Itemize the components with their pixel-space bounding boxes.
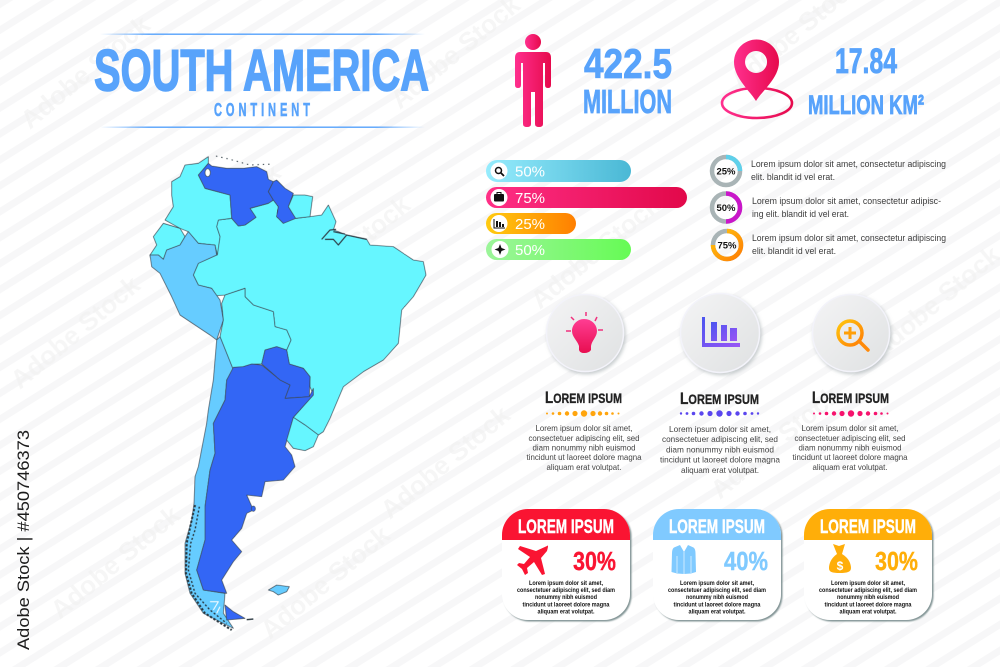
map: Venezuela [198,163,273,226]
map: Chilean fjords coast [186,505,232,630]
body text [668,580,766,616]
icon: person [515,34,551,127]
map: Amazon delta [322,229,367,245]
description: Lorem ipsum dolor sit amet, [669,424,771,434]
body text: nonummy nibh euismod [686,594,748,601]
text: Adobe Stock [5,269,146,395]
dots [813,410,888,417]
map: Argentina [197,364,313,593]
map: Suriname [288,195,313,218]
text: item 3: Lorem ipsum dolor sit amet, consectetur adipiscing [752,233,946,243]
map: Chile [185,337,233,628]
donut: 25%: 25% [716,166,736,178]
body text: nonummy nibh euismod [837,594,899,601]
unit: MILLION KM² [808,90,924,120]
map: Ecuador [150,223,185,259]
description: tincidunt ut laoreet dolore magna [526,452,642,462]
bar: 75% briefcase [486,187,687,208]
description: aliquam erat volutpat. [546,462,622,472]
icon: location pin [722,40,792,118]
text: item 1 [751,159,946,182]
panel: card blue: LOREM IPSUM [669,516,765,538]
map: South America [150,156,426,630]
description: aliquam erat volutpat. [681,465,759,475]
description: diam nonummy nibh euismod [666,444,774,454]
title block [94,34,429,128]
heading: LOREM IPSUM [545,388,622,407]
body text [819,580,917,616]
icon: money bag: $ [837,559,844,573]
body text: consectetuer adipiscing elit, sed diam [668,587,766,594]
donut: 75% [713,231,741,259]
text: item 3 [752,233,946,256]
description: consectetuer adipiscing elit, sed [794,433,906,443]
body text: tincidunt ut laoreet dolore magna [522,602,610,608]
body text: Lorem ipsum dolor sit amet, [680,580,754,587]
text: item 2 [752,196,941,219]
text: Adobe Stock [705,379,846,505]
bar: 50% star [486,239,631,260]
map: Caribbean islands [216,156,273,165]
panel: card amber: LOREM IPSUM [820,516,916,538]
number: 422.5 [584,40,672,87]
number: 17.84 [835,42,897,81]
map: Tierra del Fuego [225,605,245,620]
body text: consectetuer adipiscing elit, sed diam [819,587,917,594]
bar: 50% search: 50% [515,164,545,180]
bar: 50% search [486,160,631,182]
unit: MILLION [583,83,672,120]
text: Adobe Stock [195,399,336,525]
description: tincidunt ut laoreet dolore magna [660,454,780,464]
description [660,424,780,475]
map: Uruguay [287,417,318,451]
map: Guyana [268,180,296,223]
text: Adobe Stock [157,159,287,275]
description: Lorem ipsum dolor sit amet, [536,423,632,433]
text: item 2: ing elit. blandit id vel erat. [752,209,849,219]
donut: 50% [712,194,740,222]
stock credit: Adobe Stock | #450746373 [15,430,33,650]
icon: suit jacket [672,545,696,574]
description [792,423,908,472]
percent: 40% [724,546,768,576]
description: aliquam erat volutpat. [812,462,888,472]
map: Bolivia [220,288,291,370]
dots [546,410,620,417]
card header [804,509,932,540]
body text: tincidunt ut laoreet dolore magna [674,602,761,608]
panel: card blue [653,509,781,620]
title: SOUTH AMERICA [94,38,429,104]
text: Adobe Stock [45,499,186,625]
map: Brazil [193,200,426,435]
text: Adobe Stock [525,189,666,315]
body text: nonummy nibh euismod [535,594,597,601]
donut list [712,157,946,259]
heading: LOREM IPSUM [680,389,759,408]
body text: consectetuer adipiscing elit, sed diam [517,587,615,594]
stat: population [515,34,672,127]
bar chart [486,160,687,260]
body text: Lorem ipsum dolor sit amet, [529,580,603,587]
donut: 50%: 50% [716,203,736,214]
description: diam nonummy nibh euismod [798,442,902,452]
description [526,423,642,472]
body text [517,580,615,616]
percent: 30% [573,546,616,576]
stat: area [722,40,924,120]
feature: search [792,294,908,472]
description: tincidunt ut laoreet dolore magna [792,452,908,462]
map: Falkland Islands [268,585,289,595]
description: diam nonummy nibh euismod [532,442,636,452]
card header [502,509,630,540]
dots [680,410,759,417]
panel: card amber [804,509,932,620]
icon: bar chart [680,294,760,372]
panel: card red [502,509,630,620]
map: Paraguay [262,347,310,398]
body text: aliquam erat volutpat. [688,608,746,616]
text: item 3: elit. blandit id vel erat. [752,246,836,256]
donut: 75%: 75% [717,240,737,252]
body text: aliquam erat volutpat. [840,608,897,616]
text: Adobe Stock [255,519,396,645]
bar: 75% briefcase: 75% [515,190,545,207]
feature: idea [526,294,642,472]
text: item 2: Lorem ipsum dolor sit amet, consectetur adipisc- [752,196,941,206]
panel: card red: LOREM IPSUM [518,516,614,538]
text: Adobe Stock [15,9,156,135]
text: Adobe Stock [375,399,516,525]
text: item 1: Lorem ipsum dolor sit amet, consectetur adipiscing [751,159,946,169]
description: consectetuer adipiscing elit, sed [528,433,640,443]
feature: analytics [660,294,780,475]
heading: LOREM IPSUM [812,388,889,407]
body text: Lorem ipsum dolor sit amet, [831,580,905,587]
icon: airplane [517,546,548,575]
bar: 50% star: 50% [515,242,545,259]
description: consectetuer adipiscing elit, sed [662,434,778,444]
text: Adobe Stock [275,189,416,315]
body text: aliquam erat volutpat. [538,608,595,616]
text: item 1: elit. blandit id vel erat. [751,172,835,182]
card header [653,509,781,540]
bar: 25% chart: 25% [515,216,545,233]
bar: 25% chart [486,213,576,234]
icon: magnifier [812,294,890,372]
icon: light bulb [546,294,624,372]
subtitle: CONTINENT [214,100,310,121]
map: Peru [150,232,223,340]
map: Colombia [165,157,232,255]
percent: 30% [875,546,918,576]
donut: 25% [712,157,740,185]
description: Lorem ipsum dolor sit amet, [802,423,898,433]
body text: tincidunt ut laoreet dolore magna [824,602,912,608]
